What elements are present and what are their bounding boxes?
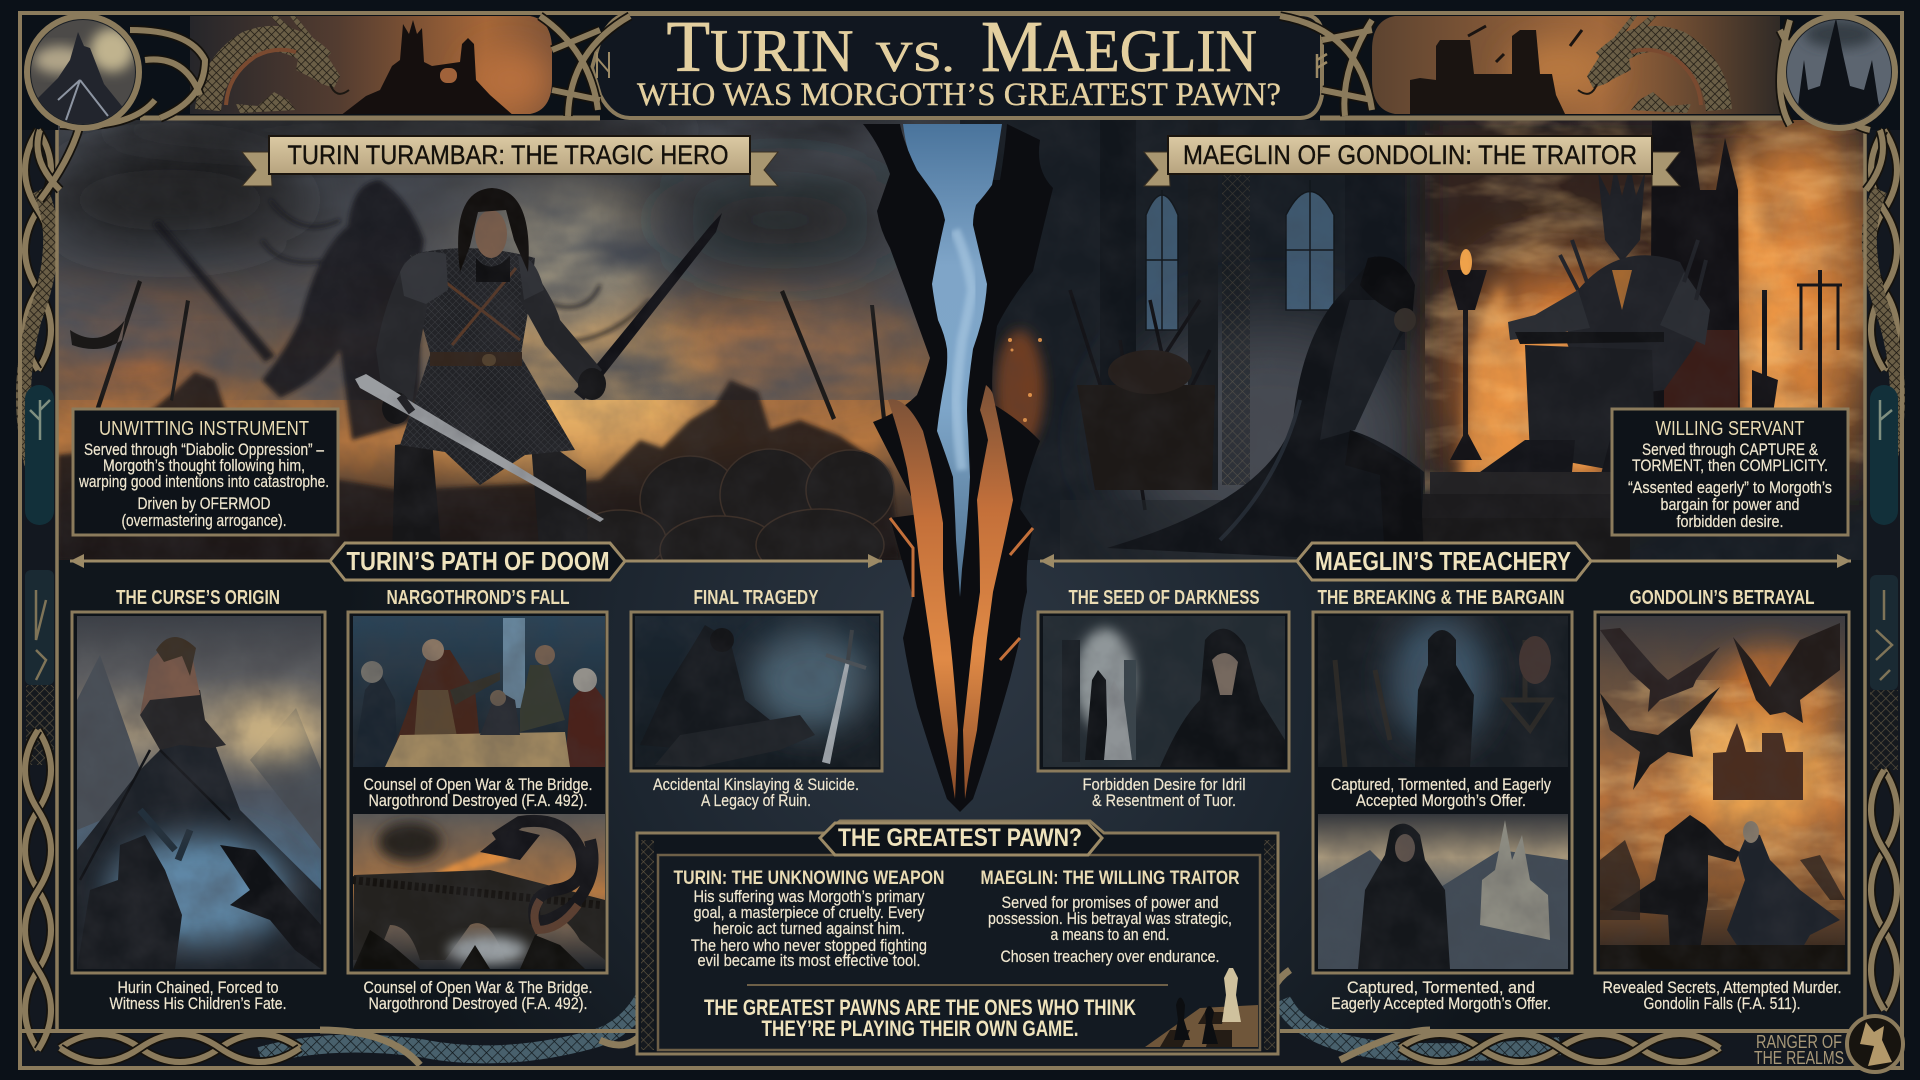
column: Maeglin verdict: a means to an end.: [1050, 925, 1170, 944]
duelists: [1610, 815, 1740, 950]
conclusion quote: THE GREATEST PAWNS ARE THE ONES WHO THINK: [704, 995, 1136, 1020]
icon: left rune tile: [25, 385, 54, 685]
panel: the seed of darkness: [1038, 587, 1289, 810]
panel: title plaque: [592, 14, 1322, 118]
logo: Ranger of the Realms: RANGER OF: [1756, 1032, 1842, 1052]
panel: the breaking and the bargain: Accepted Morgoth’s Offer.: [1356, 791, 1526, 810]
dragons: [1600, 628, 1720, 712]
title: [666, 6, 1257, 87]
panel: Nargothrond's fall: Counsel of Open War & The Bridge.: [364, 775, 592, 794]
title: TURIN: [666, 6, 854, 87]
icon: mountain medallion: [27, 16, 139, 130]
panel: Gondolin's betrayal: Gondolin Falls (F.A. 511).: [1644, 994, 1800, 1013]
callout: unwitting instrument: Driven by OFERMOD: [138, 494, 270, 513]
panel: final tragedy: A Legacy of Ruin.: [701, 791, 811, 810]
logo: Ranger of the Realms: [1754, 1016, 1903, 1072]
panel: Nargothrond's fall: [348, 587, 607, 1013]
distant army silhouettes: [58, 280, 900, 560]
panel: the curse's origin: Witness His Children’s Fate.: [110, 994, 286, 1013]
callout: unwitting instrument: (overmastering arrogance).: [122, 511, 286, 530]
column: Maeglin verdict: [980, 868, 1240, 966]
fortress silhouette: [340, 20, 514, 116]
section heading: Maeglin's treachery: MAEGLIN’S TREACHERY: [1315, 546, 1571, 576]
callout: unwitting instrument: Morgoth’s thought following him,: [103, 456, 305, 475]
icon: right title rune: [1317, 54, 1327, 78]
fortress silhouette: [1410, 30, 1566, 116]
icon: wolf emblem: [1847, 1016, 1903, 1072]
panel: Gondolin's betrayal: [1595, 587, 1849, 1013]
panel: the greatest pawn: [637, 821, 1278, 1054]
panel: the breaking and the bargain: THE BREAKING & THE BARGAIN: [1318, 587, 1564, 609]
panel: the breaking and the bargain: Eagerly Accepted Morgoth’s Offer.: [1331, 994, 1551, 1013]
section heading: Turin's path of doom: [70, 543, 882, 580]
column: Turin verdict: His suffering was Morgoth’s primary: [694, 887, 925, 906]
column: Maeglin verdict: Served for promises of power and: [1002, 893, 1218, 912]
callout: willing servant: “Assented eagerly” to Morgoth’s: [1628, 478, 1832, 497]
icon: dark tower medallion: [1783, 16, 1895, 130]
conclusion quote: [704, 995, 1136, 1041]
panel: Nargothrond's fall: Nargothrond Destroyed (F.A. 492).: [368, 994, 588, 1013]
icon: chess pieces on a board: [1145, 968, 1258, 1047]
banner: Maeglin heading: MAEGLIN OF GONDOLIN: THE TRAITOR: [1183, 140, 1637, 170]
pile of fallen soldiers: [587, 448, 895, 560]
callout: unwitting instrument: Served through “Diabolic Oppression” –: [84, 440, 324, 459]
logo: Ranger of the Realms: THE REALMS: [1754, 1048, 1844, 1068]
panel: final tragedy: FINAL TRAGEDY: [694, 587, 819, 609]
column: Turin verdict: goal, a masterpiece of cruelty. Every: [694, 903, 925, 922]
column: Turin verdict: heroic act turned against him.: [713, 919, 905, 938]
subtitle: WHO WAS MORGOTH’S GREATEST PAWN?: [637, 77, 1281, 113]
panel: Turin battlefield scene: [58, 120, 960, 560]
panel: the seed of darkness: Forbidden Desire for Idril: [1082, 775, 1246, 794]
banner: Turin heading: [242, 136, 778, 186]
callout: unwitting instrument: [73, 409, 338, 535]
scene: captive in the dungeon: [1318, 615, 1568, 767]
callout: willing servant: [1612, 409, 1848, 535]
weapon rack and sparks: [1070, 290, 1210, 510]
panel: the curse's origin: Hurin Chained, Forced to: [118, 978, 278, 997]
stone steps: [1422, 472, 1630, 560]
panel: the curse's origin: THE CURSE’S ORIGIN: [116, 587, 280, 609]
callout: willing servant: Served through CAPTURE &: [1642, 440, 1819, 459]
callout: unwitting instrument: UNWITTING INSTRUMENT: [99, 418, 309, 440]
panel: right header scene with fortress and dragon: [1370, 8, 1790, 116]
scene: Maeglin before Gondolin: [1318, 814, 1568, 969]
column: Turin verdict: evil became its most effective tool.: [698, 951, 920, 970]
callout: willing servant: forbidden desire.: [1676, 512, 1784, 531]
shadow of Morgoth behind Turin: [153, 180, 650, 440]
figure: Turin with two swords: [355, 188, 722, 560]
burning city: [1713, 723, 1803, 800]
torch stands: [1447, 270, 1842, 460]
panel: left header scene with fortress and dragon: [190, 8, 560, 116]
panel: Maeglin throne room scene: [960, 110, 1870, 562]
panel: the breaking and the bargain: Captured, Tormented, and: [1347, 978, 1535, 997]
icon: left title rune: [597, 52, 609, 78]
column: Turin verdict: The hero who never stopped fighting: [691, 936, 927, 955]
figure: Morgoth seated on throne: [1480, 120, 1740, 478]
panel: the breaking and the bargain: [1313, 587, 1572, 1013]
panel: Gondolin's betrayal: GONDOLIN’S BETRAYAL: [1630, 587, 1814, 609]
callout: willing servant: WILLING SERVANT: [1656, 418, 1804, 440]
panel: Nargothrond's fall: NARGOTHROND’S FALL: [386, 587, 570, 609]
heading plaque: THE GREATEST PAWN?: [838, 824, 1082, 852]
panel: final tragedy: [631, 587, 882, 810]
scene: dragon on the bridge: [352, 814, 605, 969]
gothic windows: [1146, 180, 1334, 330]
section heading: Turin's path of doom: TURIN’S PATH OF DOOM: [346, 546, 610, 576]
column: Maeglin verdict: MAEGLIN: THE WILLING TRAITOR: [980, 868, 1240, 889]
figure: Maeglin kneeling: [1107, 256, 1424, 560]
column: Turin verdict: [674, 868, 944, 970]
panel: the seed of darkness: THE SEED OF DARKNESS: [1068, 587, 1260, 609]
icon: central rift dividing the two stories: [863, 124, 1053, 812]
banner: Maeglin heading: [1144, 136, 1680, 186]
banner: Turin heading: TURIN TURAMBAR: THE TRAGIC HERO: [288, 140, 728, 170]
conclusion quote: THEY’RE PLAYING THEIR OWN GAME.: [762, 1016, 1078, 1041]
icon: right rune tile: [1870, 385, 1898, 690]
panel: the curse's origin: [72, 587, 325, 1013]
column: Maeglin verdict: possession. His betrayal was strategic,: [988, 909, 1232, 928]
panel: Nargothrond's fall: Counsel of Open War & The Bridge.: [364, 978, 592, 997]
dragon: [1578, 8, 1719, 113]
top corner knots: [38, 16, 1883, 200]
dragon: [208, 8, 349, 113]
callout: willing servant: TORMENT, then COMPLICITY.: [1632, 456, 1828, 475]
callout: unwitting instrument: warping good intentions into catastrophe.: [78, 472, 329, 491]
scene: the council: [353, 616, 605, 767]
lower section background: [58, 550, 1864, 1032]
header band: [190, 8, 1790, 118]
column: Maeglin verdict: Chosen treachery over endurance.: [1000, 947, 1220, 966]
panel: the seed of darkness: & Resentment of Tuor.: [1092, 791, 1236, 810]
callout: willing servant: bargain for power and: [1660, 495, 1800, 514]
panel: the breaking and the bargain: Captured, Tormented, and Eagerly: [1331, 775, 1551, 794]
section heading: Maeglin's treachery: [1040, 543, 1851, 580]
panel: Nargothrond's fall: Nargothrond Destroyed (F.A. 492).: [368, 791, 588, 810]
column: Turin verdict: TURIN: THE UNKNOWING WEAPON: [674, 868, 944, 889]
panel: Gondolin's betrayal: Revealed Secrets, Attempted Murder.: [1602, 978, 1842, 997]
title: MAEGLIN: [981, 6, 1257, 87]
title: VS.: [876, 35, 954, 81]
panel: final tragedy: Accidental Kinslaying & Suicide.: [653, 775, 859, 794]
